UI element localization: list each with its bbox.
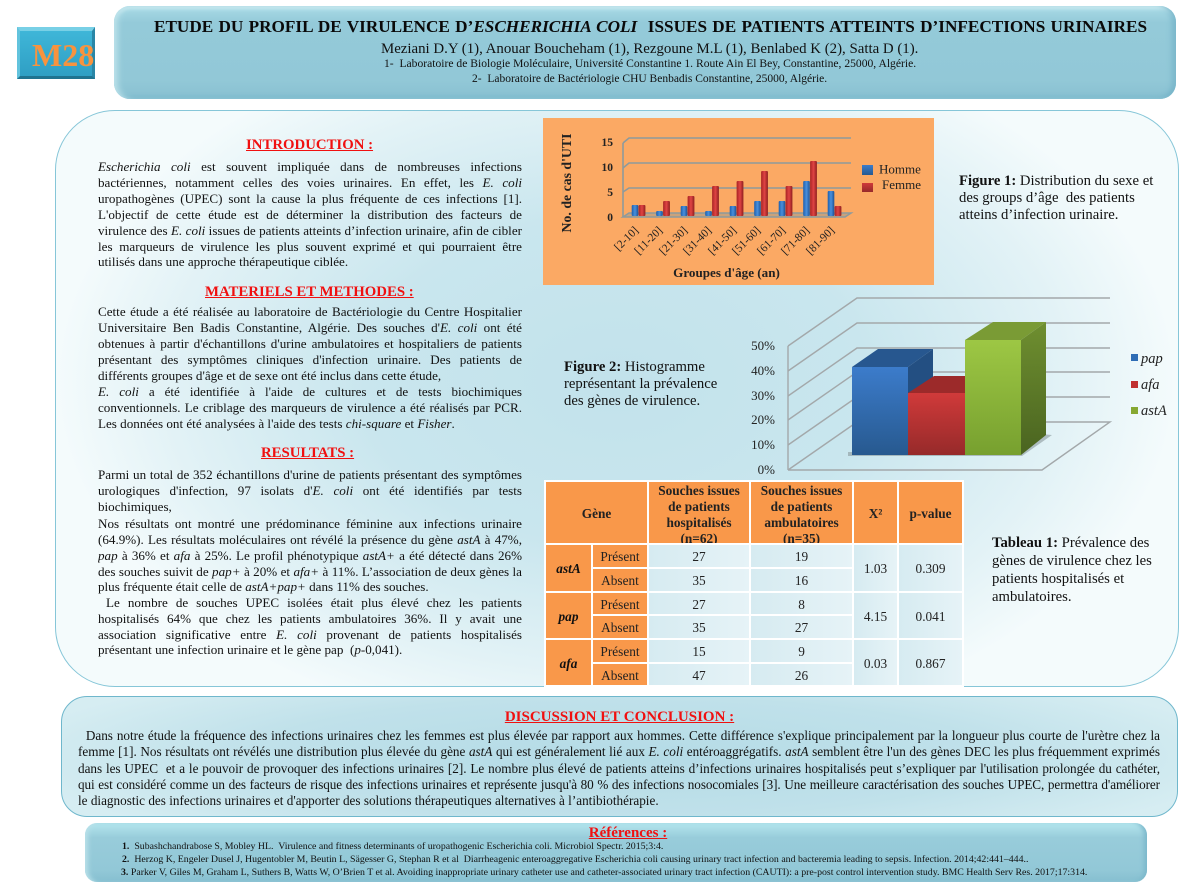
x axis title: Groupes d'âge (an) xyxy=(673,265,780,280)
text: uropathogènes (UPEC) sont la cause la plus fréquente de ces infections [1]. xyxy=(98,191,522,206)
heading: discussion: DISCUSSION ET CONCLUSION : xyxy=(505,709,734,725)
table 1: gene prevalence: 8 xyxy=(798,596,805,612)
legend xyxy=(862,162,921,192)
text: (64.9%). Les résultats moléculaires ont révélé la présence du gène astA à 47%, xyxy=(98,532,522,547)
bar: pap xyxy=(852,349,933,455)
table 1: gene prevalence: de patients xyxy=(771,499,832,514)
text: bactériennes, notamment celles des voies urinaires. En effet, les E. coli xyxy=(98,175,522,190)
text: utilisés dans une approche thérapeutique ciblée. xyxy=(98,254,348,269)
references panel xyxy=(85,823,1147,882)
figure 1 caption: des groups d’âge des patients xyxy=(959,190,1135,206)
materials and methods section xyxy=(98,284,522,431)
text: E. coli a été identifiée à l'aide de cultures et de tests biochimiques xyxy=(98,384,522,399)
table 1: gene prevalence: Présent xyxy=(600,596,640,612)
text: conventionnels. Le criblage des marqueurs de virulence a été réalisés par PCR. xyxy=(98,400,522,415)
text: introduction xyxy=(98,159,522,269)
x axis labels: [81-90] xyxy=(804,225,837,258)
header banner xyxy=(114,6,1176,99)
legend: pap xyxy=(1140,351,1163,367)
bar: astA xyxy=(965,322,1046,455)
table 1: gene prevalence: 27 xyxy=(795,620,808,635)
bar: afa xyxy=(908,376,990,455)
table 1: gene prevalence: 15 xyxy=(692,644,706,659)
text: L'objectif de cette étude est de déterminer la distribution des facteurs de xyxy=(98,207,522,222)
x axis labels xyxy=(612,225,837,258)
text: plus fréquente était celle de astA+pap+ dans 11% des souches. xyxy=(98,579,429,594)
x axis labels: [61-70] xyxy=(755,225,788,258)
y axis labels xyxy=(602,137,613,224)
code badge M28 xyxy=(17,27,95,79)
text: virulence des E. coli issues de patients atteints d’infection urinaire, afin de cibler xyxy=(98,223,522,238)
table 1: gene prevalence: 1.03 xyxy=(864,561,887,576)
introduction section xyxy=(98,137,522,269)
text: methods xyxy=(98,304,522,431)
title: ETUDE DU PROFIL DE VIRULENCE D’ESCHERICHIA COLI ISSUES DE PATIENTS ATTEINTS D’INFECTIONS URINAIRES xyxy=(154,17,1147,36)
table 1 caption: gènes de virulence chez les xyxy=(992,553,1152,569)
table 1: gene prevalence: X² xyxy=(869,506,882,520)
reference 1: 1. Subashchandrabose S, Mobley HL. Virulence and fitness determinants of uropathogenic Escherichia coli. Microbiol Spectr. 2015;3:4. xyxy=(122,841,663,852)
table 1: gene prevalence: p-value xyxy=(909,506,952,520)
text: dans les UPEC et a le pouvoir de provoquer des infections urinaires [2]. Le nombre plus élevé de patients atteins d’infections urinaires hospitalisés peut s’expliquer par l'utilisation prolongée du cathéter, xyxy=(78,761,1160,776)
x axis labels: [31-40] xyxy=(681,225,714,258)
y axis labels: 40% xyxy=(751,363,775,378)
affiliation 1: 1- Laboratoire de Biologie Moléculaire, Université Constantine 1. Route Ain El Bey, Constantine, 25000, Algérie. xyxy=(384,57,916,70)
text: Nos résultats ont montré une prédominance féminine aux infections urinaire xyxy=(98,516,522,531)
text: le diagnostic des infections urinaires et d'apporter des solutions thérapeutiques alternatives à l’antibiothérapie. xyxy=(78,793,659,808)
table 1: gene prevalence: 35 xyxy=(692,573,706,588)
text: urologiques d'infection, 97 isolats d'E. coli ont été identifiés par tests xyxy=(98,483,522,498)
y axis labels: 10% xyxy=(751,437,775,452)
text: Cette étude a été réalisée au laboratoire de Bactériologie du Centre Hospitalier xyxy=(98,304,522,319)
table 1: gene prevalence: hospitalisés xyxy=(666,515,732,530)
table 1: gene prevalence: pap xyxy=(559,608,578,624)
table 1: gene prevalence: Absent xyxy=(601,573,639,588)
table 1: gene prevalence: Absent xyxy=(601,620,639,635)
x axis labels: [21-30] xyxy=(657,225,690,258)
series: femme bars xyxy=(639,161,841,216)
series: homme bars xyxy=(632,181,834,216)
table 1: gene prevalence: Absent xyxy=(601,668,639,682)
text: association significative entre E. coli provenant de patients hospitalisés xyxy=(98,627,522,642)
table 1: gene prevalence: ambulatoires xyxy=(764,515,839,530)
text: Le nombre de souches UPEC isolées était plus élevé chez les patients xyxy=(106,595,522,610)
table 1: gene prevalence: 9 xyxy=(798,644,805,659)
text: différents groupes d'âge et de sexe ont été inclus dans cette étude, xyxy=(98,368,441,383)
table 1: gene prevalence: 0.041 xyxy=(916,608,945,624)
text: qui est considéré comme un des facteurs de risque des infections urinaires et représente jusqu'à 80 % des infections nosocomiales [3]. Une meilleure caractérisation des souches UPEC, permettra d'améliorer xyxy=(78,777,1160,792)
figure 1 caption: Figure 1: Distribution du sexe et xyxy=(959,173,1153,189)
y axis labels xyxy=(751,338,775,477)
table 1: gene prevalence: 27 xyxy=(692,596,706,612)
text: pap à 36% et afa à 25%. Le profil phénotypique astA+ a été détecté dans 26% xyxy=(98,548,522,563)
text: Universitaire Ben Badis Constantine, Algérie. Des souches d'E. coli ont été xyxy=(98,320,522,335)
table 1: gene prevalence: afa xyxy=(560,656,577,670)
text: présentant une infection urinaire et le gène pap (p-0,041). xyxy=(98,642,402,657)
table 1: gene prevalence: Souches issues xyxy=(658,483,740,498)
x axis labels: [51-60] xyxy=(730,225,763,258)
discussion text xyxy=(78,728,1160,808)
table 1 caption xyxy=(992,535,1152,605)
figure 1 caption xyxy=(959,173,1154,223)
figure 2 caption xyxy=(564,359,717,409)
floor shadow xyxy=(848,434,1052,456)
y axis labels: 10 xyxy=(602,162,613,174)
results section xyxy=(98,445,522,657)
figure 2 caption: des gènes de virulence. xyxy=(564,393,700,409)
text: des souches suivit de pap+ à 20% et afa+ à 11%. L’association de deux gènes la xyxy=(98,564,522,579)
x axis labels: [71-80] xyxy=(779,225,812,258)
text: les marqueurs de virulence les plus souvent exprimé et qui pourraient être xyxy=(98,239,522,254)
x axis labels: [11-20] xyxy=(633,225,665,257)
legend: Homme xyxy=(879,162,921,176)
grid walls xyxy=(788,298,1110,470)
x axis labels: [2-10] xyxy=(612,225,641,253)
y axis labels: 0 xyxy=(607,212,613,224)
table 1: gene prevalence: 26 xyxy=(795,668,808,682)
gridlines and axis xyxy=(623,138,851,217)
table 1: gene prevalence: Présent xyxy=(600,644,640,659)
table 1: gene prevalence: 27 xyxy=(692,549,706,564)
authors: Meziani D.Y (1), Anouar Boucheham (1), Rezgoune M.L (1), Benlabed K (2), Satta D (1). xyxy=(381,41,918,57)
text: results xyxy=(98,467,522,657)
heading: references: Références : xyxy=(589,825,667,841)
text: présentant des symptômes cliniques d'infection urinaire. Des patients de xyxy=(98,352,522,367)
table 1 caption: patients hospitalisés et xyxy=(992,571,1124,587)
legend xyxy=(1131,351,1167,419)
heading: materiels et methodes: MATERIELS ET METHODES : xyxy=(205,284,414,300)
text: Escherichia coli est souvent impliquée dans de nombreuses infections xyxy=(98,159,522,174)
y axis labels: 20% xyxy=(751,412,775,427)
table 1: gene prevalence: 47 xyxy=(692,668,706,682)
figure 2 caption: Figure 2: Histogramme xyxy=(564,359,705,375)
x axis labels: [41-50] xyxy=(706,225,739,258)
y axis labels: 15 xyxy=(602,137,613,149)
table 1: gene prevalence: Présent xyxy=(600,549,640,564)
table 1: gene prevalence: 0.309 xyxy=(916,561,945,576)
y axis labels: 30% xyxy=(751,388,775,403)
table 1: gene prevalence: astA xyxy=(556,561,581,576)
y axis labels: 5 xyxy=(607,187,613,199)
text: obtenues à partir d'échantillons d'urine ambulatoires et hospitaliers de patients xyxy=(98,336,522,351)
table 1: gene prevalence: 0.867 xyxy=(916,656,945,670)
code badge M28: M28 xyxy=(32,37,94,73)
table 1: gene prevalence: 0.03 xyxy=(864,656,887,670)
discussion panel xyxy=(61,696,1178,817)
text: femme [1]. Nos résultats ont révélés une distribution plus élevée du gène astA qui est généralement lié aux E. coli entéroaggrégatifs. astA semblent être l'un des gènes DEC les plus fréquemment exprimés xyxy=(78,744,1160,759)
heading: introduction: INTRODUCTION : xyxy=(246,137,373,153)
table 1 caption: ambulatoires. xyxy=(992,589,1072,605)
figure 2 caption: représentant la prévalence xyxy=(564,376,717,392)
table 1: gene prevalence: Gène xyxy=(582,506,611,520)
reference 2: 2. Herzog K, Engeler Dusel J, Hugentobler M, Beutin L, Sägesser G, Stephan R et al Diarrheagenic enteroaggregative Escherichia coli causing urinary tract infection and bacteremia leading to sepsis. Infection. 2014;42:441–444.. xyxy=(122,854,1028,865)
table 1: gene prevalence: 16 xyxy=(795,573,808,588)
reference 3: 3. Parker V, Giles M, Graham L, Suthers B, Watts W, O’Brien T et al. Avoiding inappropriate urinary catheter use and catheter-associated urinary tract infection (CAUTI): a pre-post control intervention study. BMC Health Serv Res. 2017;17:314. xyxy=(121,867,1087,878)
affiliation 2: 2- Laboratoire de Bactériologie CHU Benbadis Constantine, 25000, Algérie. xyxy=(472,73,827,85)
legend: Femme xyxy=(882,177,921,192)
table 1 caption: Tableau 1: Prévalence des xyxy=(992,535,1149,551)
table 1: gene prevalence xyxy=(544,480,964,687)
text: Dans notre étude la fréquence des infections urinaires chez les femmes est plus élevée par rapport aux hommes. Cette différence s'explique principalement par la longueur plus courte de l'urètre chez la xyxy=(86,728,1160,743)
text: Parmi un total de 352 échantillons d'urine de patients présentant des symptômes xyxy=(98,467,522,482)
table 1: gene prevalence: 4.15 xyxy=(864,608,887,624)
y axis labels: 0% xyxy=(758,462,775,477)
text: Les données ont été analysées à l'aide des tests chi-square et Fisher. xyxy=(98,416,455,431)
main panel background xyxy=(55,110,1179,687)
table 1: gene prevalence: 19 xyxy=(795,549,808,564)
heading: resultats: RESULTATS : xyxy=(261,445,354,461)
text: biochimiques, xyxy=(98,499,172,514)
figure 2: 3D bar chart of gene prevalence xyxy=(751,297,1167,477)
table 1: gene prevalence: 35 xyxy=(692,620,706,635)
table 1: gene prevalence: de patients xyxy=(668,499,730,514)
y axis title: No. de cas d'UTI xyxy=(559,134,574,232)
table 1: gene prevalence: Souches issues xyxy=(761,483,842,498)
figure 1 caption: atteins d’infection urinaire. xyxy=(959,207,1118,223)
y axis labels: 50% xyxy=(751,338,775,353)
legend: astA xyxy=(1141,403,1167,419)
legend: afa xyxy=(1141,377,1160,393)
text: hospitalisés 64% que chez les patients ambulatoires 36%. Il y avait une xyxy=(98,611,522,626)
